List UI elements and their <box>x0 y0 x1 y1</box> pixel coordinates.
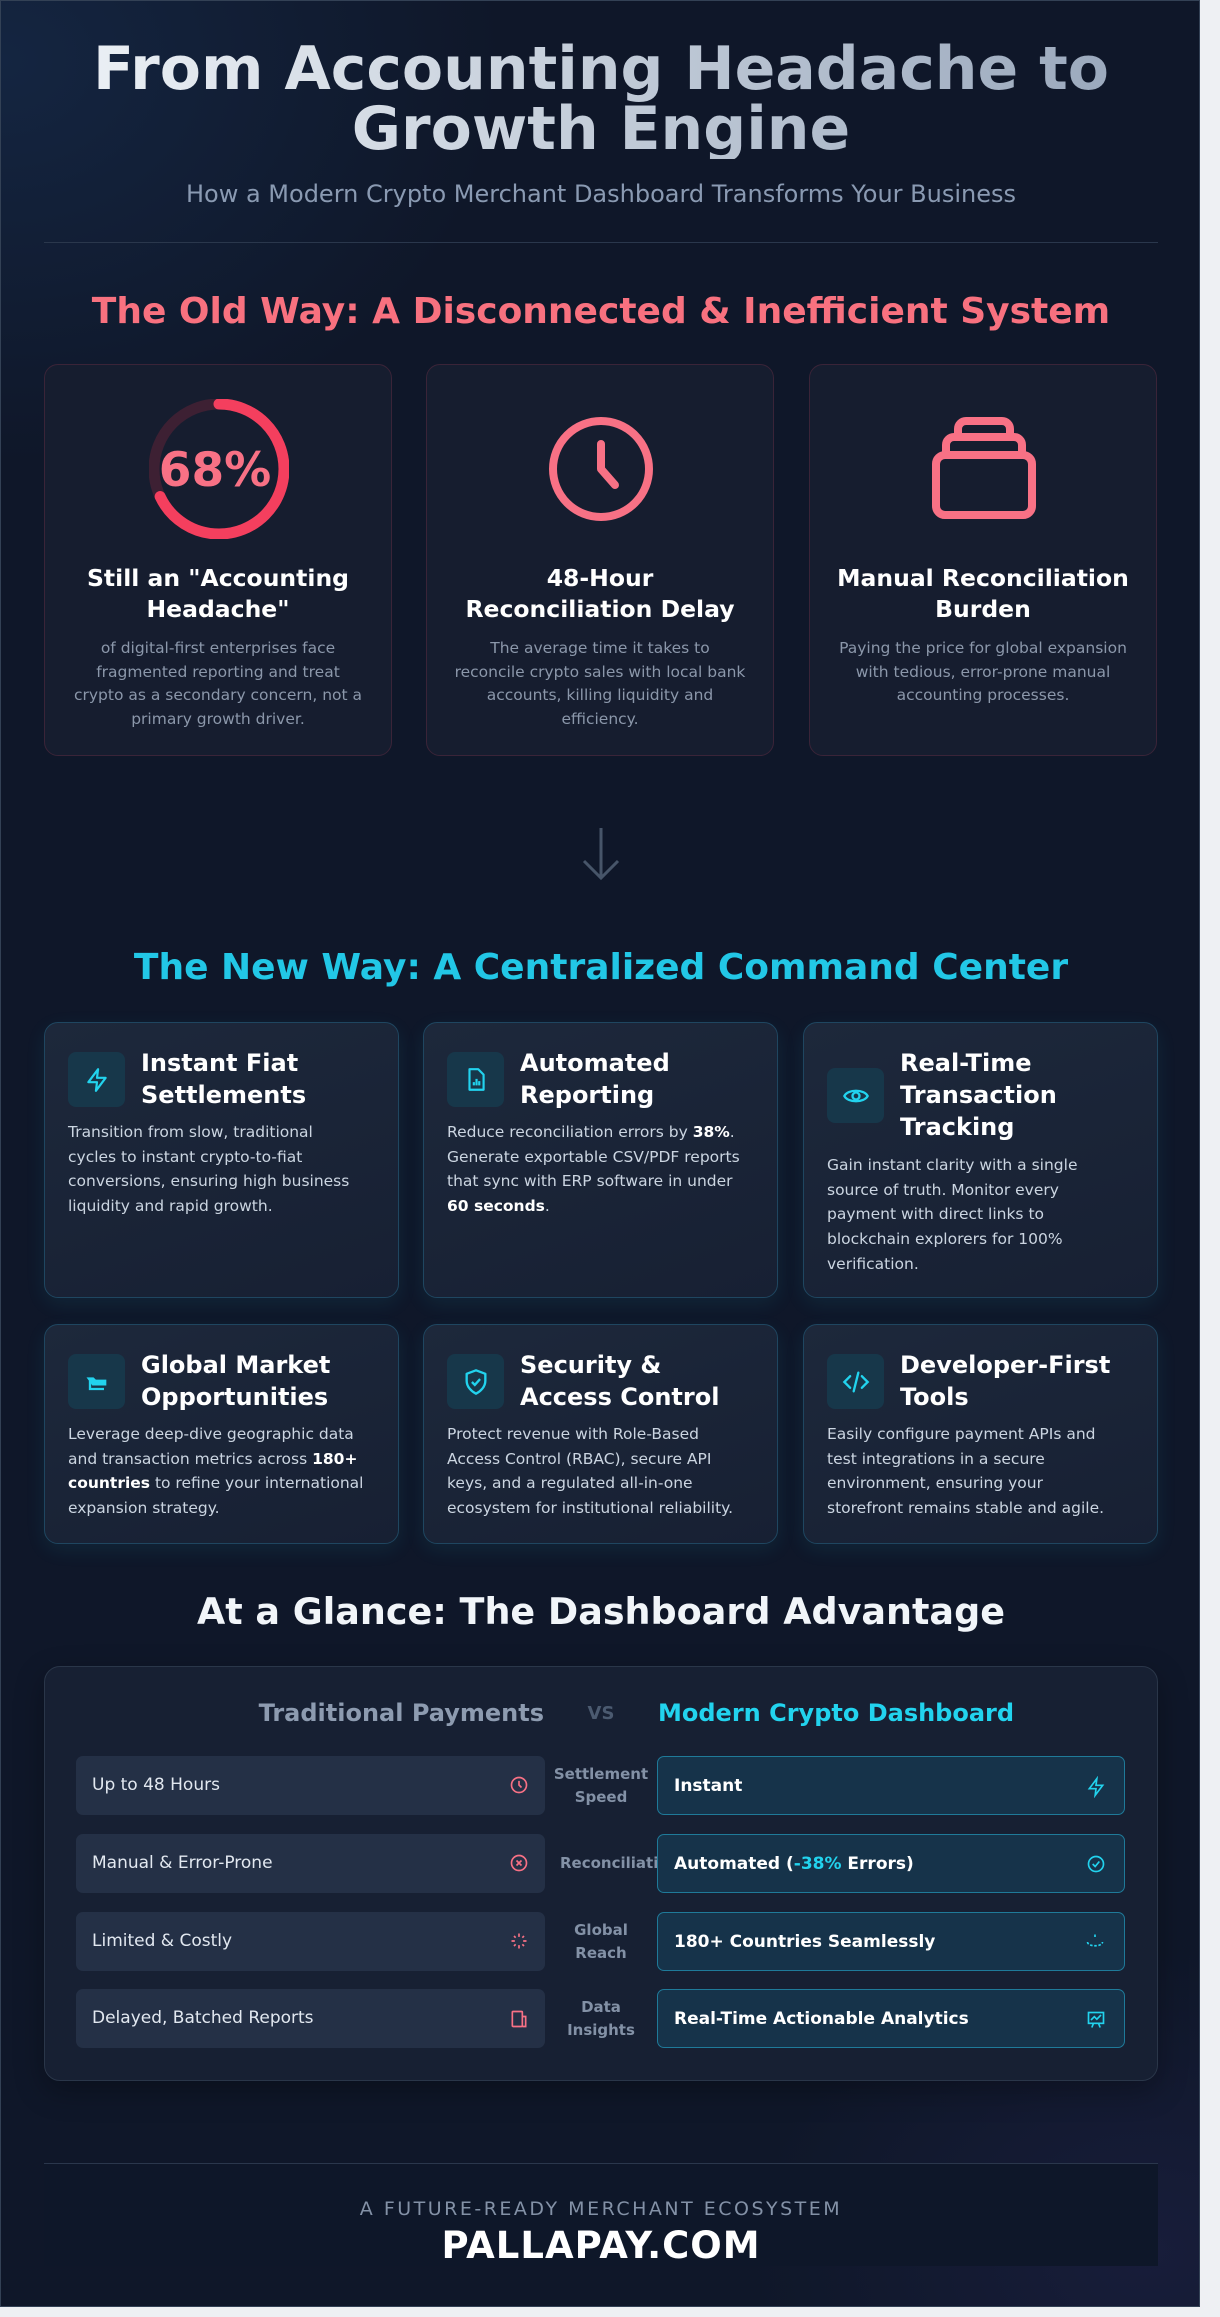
panel: automated reporting: Automated Reporting <box>520 1049 670 1109</box>
panel: 48-hour delay: Reconciliation Delay <box>465 595 735 623</box>
panel: global market <box>44 1324 399 1544</box>
panel: global market: Global Market Opportunities <box>141 1351 330 1411</box>
row: reconciliation <box>76 1834 1125 1893</box>
comparison header <box>258 1699 1014 1727</box>
panel: 68% accounting headache: crypto as a secondary concern, not a <box>74 686 362 704</box>
icon: progress ring 68% <box>149 399 289 539</box>
heading: new way: The New Way: A Centralized Command Center <box>134 947 1068 988</box>
footer <box>44 2164 1158 2266</box>
icon: clock <box>549 417 653 521</box>
panel: 68% accounting headache: Still an "Accounting <box>87 564 349 592</box>
row: global reach: 180+ Countries Seamlessly <box>674 1932 935 1952</box>
panel: instant fiat: Instant Fiat Settlements <box>141 1049 306 1109</box>
row: data insights: Data Insights <box>567 1998 635 2039</box>
icon: stacked boxes <box>932 417 1036 519</box>
comparison header: Modern Crypto Dashboard <box>658 1699 1014 1727</box>
row: global reach: Global Reach <box>574 1921 628 1962</box>
panel: 48-hour delay: accounts, killing liquidity and <box>487 686 713 704</box>
panel: developer tools: Developer-First Tools <box>900 1351 1110 1411</box>
title: Growth Engine <box>352 94 850 164</box>
row: settlement speed: Up to 48 Hours <box>92 1775 220 1795</box>
footer: A FUTURE-READY MERCHANT ECOSYSTEM <box>360 2198 842 2220</box>
panel: 68% accounting headache: primary growth driver. <box>131 710 305 728</box>
panel: instant fiat: Transition from slow, traditional cycles to instant crypto-to-fiat conversions, ensuring high business liquidity and rapid growth. <box>68 1123 349 1215</box>
panel: security <box>423 1324 778 1544</box>
icon: code <box>827 1354 884 1409</box>
row: reconciliation: Automated (-38% Errors) <box>674 1854 914 1874</box>
subtitle: How a Modern Crypto Merchant Dashboard Transforms Your Business <box>186 180 1016 208</box>
panel: developer tools <box>803 1324 1158 1544</box>
icon: eye <box>827 1068 884 1123</box>
icon: globe hand <box>68 1354 125 1409</box>
icon: shield <box>447 1354 504 1409</box>
panel: real-time tracking <box>803 1022 1158 1298</box>
row: data insights: Delayed, Batched Reports <box>92 2008 314 2028</box>
row: data insights <box>76 1989 1125 2048</box>
panel: 48-hour delay: The average time it takes to <box>490 639 710 657</box>
panel: 48-hour delay: reconcile crypto sales with local bank <box>455 663 745 681</box>
row: reconciliation: Reconciliation <box>560 1854 679 1872</box>
panel: real-time tracking: Real-Time Transaction Tracking <box>900 1049 1057 1141</box>
panel: 48-hour delay: 48-Hour <box>547 564 653 592</box>
panel: 68% accounting headache: Headache" <box>146 595 290 623</box>
comparison header: VS <box>588 1703 614 1724</box>
heading: old way: The Old Way: A Disconnected & Inefficient System <box>92 291 1110 332</box>
panel: security: Security & Access Control <box>520 1351 719 1411</box>
panel: real-time tracking: Gain instant clarity with a single source of truth. Monitor every payment with direct links to blockchain explorers for 100% verification. <box>827 1156 1077 1273</box>
title <box>1 39 1201 159</box>
panel: security: Protect revenue with Role-Based Access Control (RBAC), secure API keys, and a regulated all-in-one ecosystem for institutional reliability. <box>447 1425 733 1517</box>
panel: manual reconciliation: with tedious, error-prone manual <box>856 663 1110 681</box>
row: settlement speed: Instant <box>674 1776 742 1796</box>
panel: manual reconciliation <box>809 364 1157 756</box>
row: settlement speed <box>76 1756 1125 1815</box>
icon: lightning <box>68 1052 125 1107</box>
panel: global market: Leverage deep-dive geographic data and transaction metrics across 180+ countries to refine your international expansion strategy. <box>68 1425 364 1517</box>
row: reconciliation: Manual & Error-Prone <box>92 1853 273 1873</box>
comparison header: Traditional Payments <box>259 1699 544 1727</box>
panel: manual reconciliation: Manual Reconciliation <box>837 564 1129 592</box>
icon: progress ring 68%: 68% <box>159 443 271 498</box>
panel: manual reconciliation: Burden <box>935 595 1031 623</box>
panel: 68% accounting headache: fragmented reporting and treat <box>96 663 340 681</box>
panel: automated reporting: Reduce reconciliation errors by 38%. Generate exportable CSV/PDF reports that sync with ERP software in under 60 seconds. <box>447 1123 740 1215</box>
panel: instant fiat <box>44 1022 399 1298</box>
row: settlement speed: Settlement Speed <box>554 1765 648 1806</box>
panel: automated reporting <box>423 1022 778 1298</box>
arrow: down <box>583 828 619 880</box>
panel: developer tools: Easily configure payment APIs and test integrations in a secure environment, ensuring your storefront remains stable and agile. <box>827 1425 1104 1517</box>
row: global reach: Limited & Costly <box>92 1931 232 1951</box>
heading: at a glance: At a Glance: The Dashboard Advantage <box>197 1590 1005 1633</box>
panel: comparison table <box>44 1666 1158 2081</box>
panel: 68% accounting headache <box>44 364 392 756</box>
icon: report file <box>447 1052 504 1107</box>
panel: 48-hour delay <box>426 364 774 756</box>
row: global reach <box>76 1912 1125 1971</box>
panel: 68% accounting headache: of digital-first enterprises face <box>101 639 335 657</box>
title: From Accounting Headache to <box>93 34 1109 104</box>
panel: manual reconciliation: accounting processes. <box>897 686 1069 704</box>
footer: PALLAPAY.COM <box>441 2224 761 2267</box>
row: data insights: Real-Time Actionable Analytics <box>674 2009 969 2029</box>
panel: 48-hour delay: efficiency. <box>561 710 639 728</box>
panel: manual reconciliation: Paying the price for global expansion <box>839 639 1127 657</box>
